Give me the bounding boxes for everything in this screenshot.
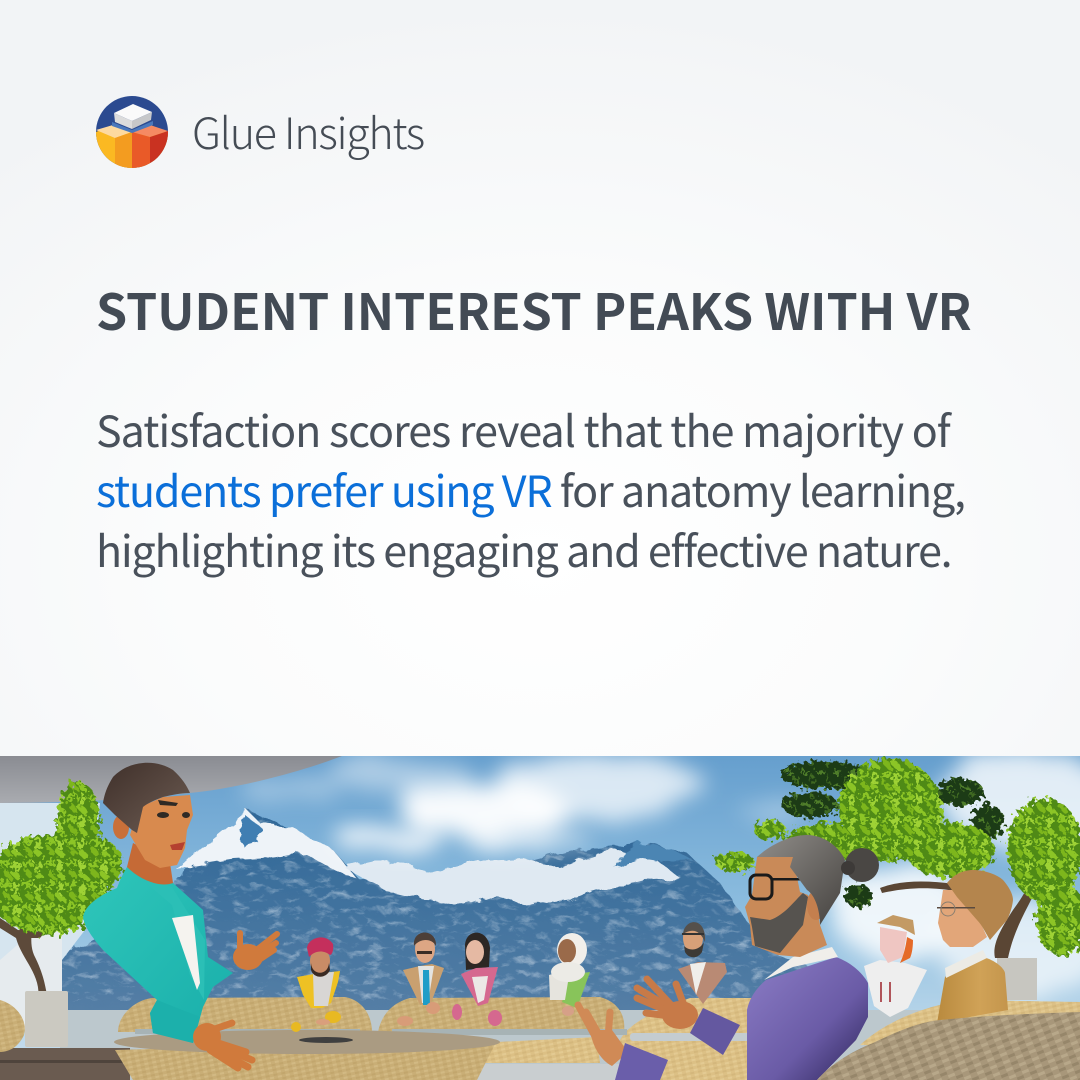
illustration: VR meeting scene bbox=[0, 756, 1080, 1080]
back sofa left bbox=[118, 997, 372, 1032]
planter right bbox=[997, 958, 1037, 1000]
lower hand bbox=[210, 1023, 252, 1068]
tree: left bbox=[0, 781, 122, 1000]
avatar: turban man bbox=[291, 937, 341, 1032]
round table bbox=[114, 1030, 500, 1080]
middle table base bbox=[480, 1037, 600, 1063]
white building wall left bbox=[0, 803, 100, 960]
mountains bbox=[62, 808, 808, 1010]
back sofa middle bbox=[378, 997, 624, 1032]
avatar: man with glasses bbox=[678, 922, 727, 1004]
upper hand bbox=[240, 933, 277, 962]
avatar: man with blue tie bbox=[397, 932, 444, 1026]
avatar: woman in cap bbox=[864, 915, 927, 1017]
avatar: presenter in teal bbox=[83, 763, 277, 1068]
logo bbox=[96, 96, 424, 168]
floor band bbox=[60, 1010, 922, 1080]
planter left bbox=[25, 991, 68, 1047]
hand and cuff: left bbox=[578, 1005, 610, 1040]
tree: right bbox=[715, 758, 1080, 958]
sky with clouds bbox=[4, 756, 1080, 1048]
icon: glue insights cube bbox=[96, 96, 168, 168]
hand and cuff: right bbox=[637, 979, 685, 1016]
body text: highlighting its engaging and effective nature. bbox=[96, 518, 951, 580]
body text: students prefer using VR for anatomy learning, bbox=[96, 458, 965, 520]
avatar: man in purple jacket bbox=[578, 835, 879, 1080]
chair left bbox=[0, 1000, 25, 1052]
foreground woven seat bbox=[817, 1012, 1080, 1080]
avatar: woman in hijab bbox=[549, 933, 590, 1016]
body text bbox=[96, 398, 965, 580]
title: STUDENT INTEREST PEAKS WITH VR bbox=[96, 273, 971, 345]
body text: Satisfaction scores reveal that the majority of bbox=[96, 398, 950, 460]
ceiling canopy bbox=[0, 756, 342, 803]
avatar: woman in pink bbox=[452, 933, 502, 1026]
avatar: man in beanie bbox=[937, 870, 1013, 1023]
back sofa right bbox=[620, 998, 760, 1080]
logo wordmark: Glue Insights bbox=[192, 100, 424, 162]
